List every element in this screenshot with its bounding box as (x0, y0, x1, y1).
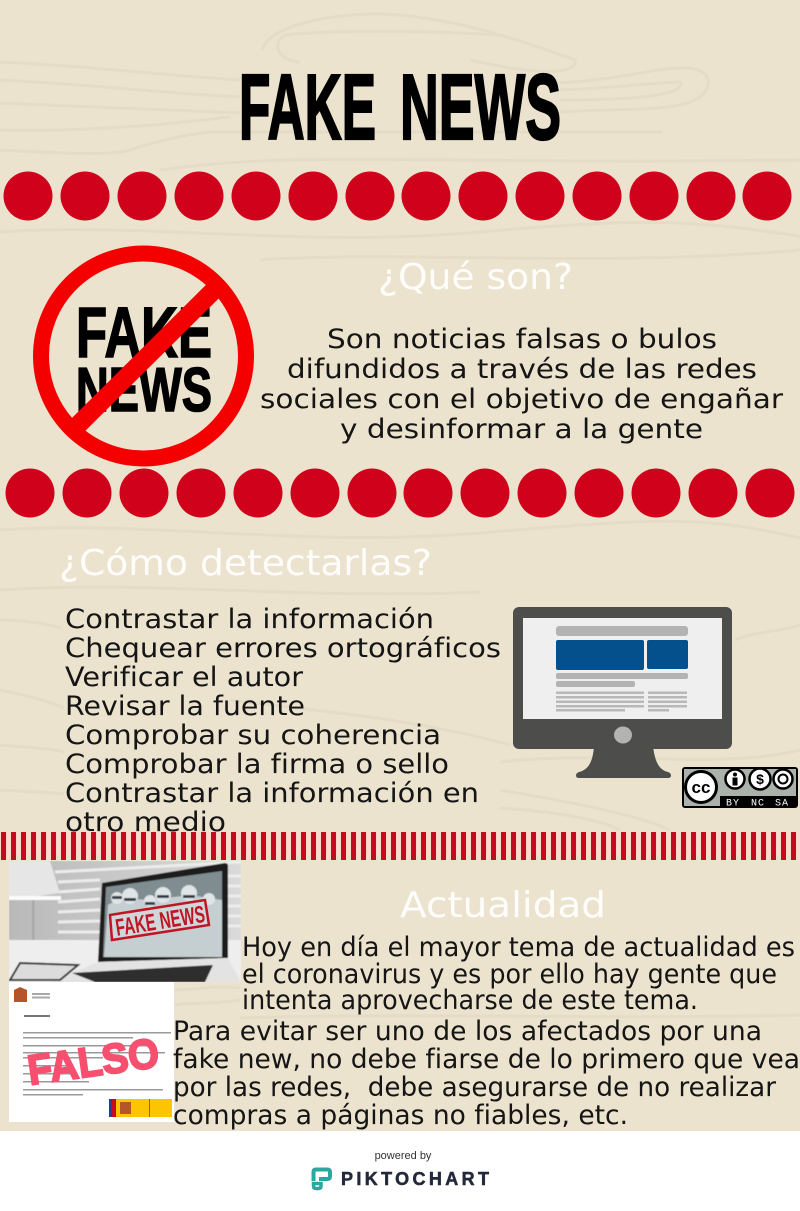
heading: que son: ¿Qué son? (378, 257, 573, 298)
text block: current events intro: el coronavirus y es por ello hay gente que (242, 959, 777, 990)
text block: advice: fake new, no debe fiarse de lo primero que vea (173, 1044, 800, 1075)
heading: como detectarlas: ¿Cómo detectarlas? (59, 543, 432, 584)
photo: laptop with fake news stamp: FAKE NEWS (114, 901, 207, 942)
title: FAKE (239, 55, 376, 159)
text block: current events intro: intenta aprovecharse de este tema. (242, 985, 698, 1016)
text block: definition: Son noticias falsas o bulos (327, 324, 717, 355)
heading: actualidad: Actualidad (400, 885, 606, 926)
text block: definition (260, 324, 784, 445)
icon: prohibited fake news sign: FAKE (76, 294, 212, 373)
icon: creative commons badge: cc (692, 778, 710, 797)
photo: fake ministry document: FALSO (25, 1029, 162, 1094)
text block: definition: y desinformar a la gente (340, 414, 703, 445)
text block: detection tips: Contrastar la información en (65, 778, 479, 809)
icon: creative commons badge: BY (726, 798, 740, 810)
icon: prohibited fake news sign (41, 254, 246, 458)
dotted divider: middle (6, 468, 794, 518)
text block: detection tips: Comprobar la firma o sello (65, 749, 449, 780)
text block: detection tips: Comprobar su coherencia (65, 720, 441, 751)
title: NEWS (400, 55, 561, 159)
text block: advice: Para evitar ser uno de los afectados por una (173, 1016, 762, 1047)
photo: fake ministry document (9, 982, 174, 1122)
text block: detection tips: Chequear errores ortográficos (65, 633, 501, 664)
text block: detection tips: Contrastar la información (65, 604, 434, 635)
dotted divider: top (4, 172, 792, 220)
icon: prohibited fake news sign: NEWS (76, 356, 212, 425)
text block: definition: difundidos a través de las redes (287, 354, 757, 385)
text block: advice: por las redes, debe asegurarse de no realizar (173, 1072, 777, 1103)
footer: piktochart branding: powered by (375, 1150, 432, 1162)
text block: detection tips: Revisar la fuente (65, 691, 305, 722)
text block: detection tips (65, 604, 501, 838)
icon: creative commons badge: SA (775, 798, 789, 810)
icon: creative commons badge: $ (756, 771, 764, 787)
striped divider (0, 832, 800, 860)
footer: piktochart branding: PIKTOCHART (341, 1169, 489, 1189)
text block: detection tips: Verificar el autor (65, 662, 304, 693)
footer: piktochart branding (0, 1131, 800, 1211)
icon: desktop monitor with news page (513, 607, 732, 778)
text block: definition: sociales con el objetivo de engañar (260, 384, 784, 415)
photo: laptop with fake news stamp (9, 861, 241, 982)
text block: advice (173, 1016, 800, 1131)
text block: current events intro (242, 932, 795, 1016)
icon: creative commons badge (682, 767, 798, 810)
text block: advice: compras a páginas no fiables, etc. (173, 1100, 628, 1131)
icon: creative commons badge: NC (751, 798, 765, 810)
text block: detection tips: otro medio (65, 807, 226, 838)
